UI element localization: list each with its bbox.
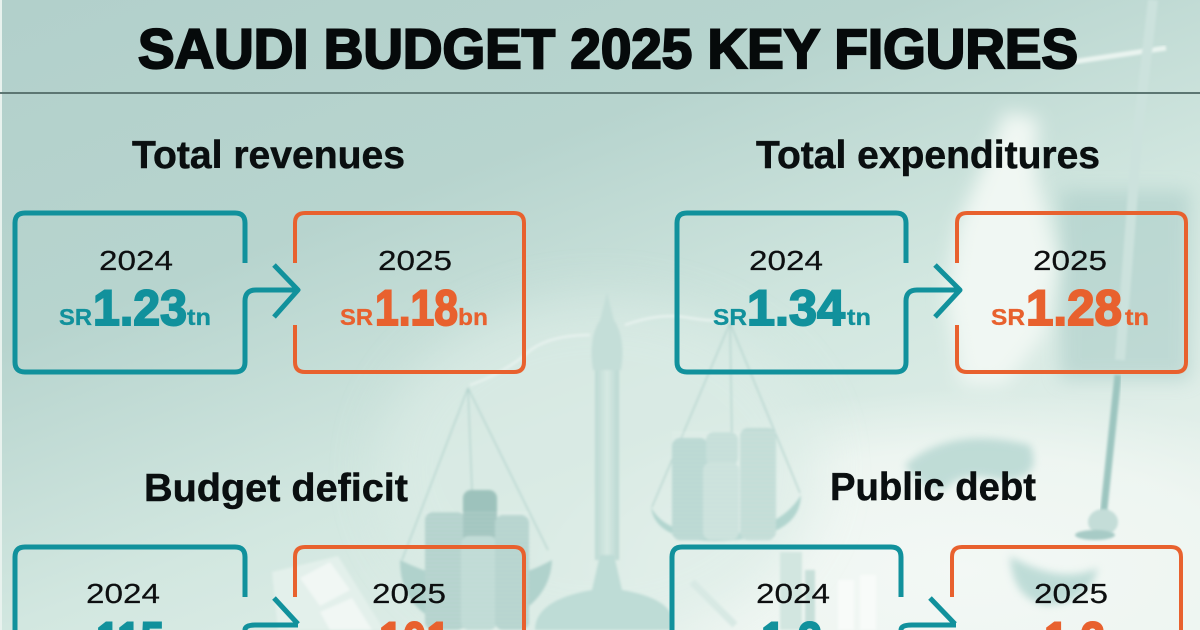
box 2025: 1.28 [1026,280,1122,336]
box 2024: tn [847,304,871,330]
box 2025: 2025 [372,578,446,609]
box 2024: SR [59,304,92,330]
panel: public debt [672,466,1181,630]
heading: public debt: Public debt [830,466,1036,509]
arrow [274,598,298,624]
box 2024 [677,213,960,372]
box 2024: 2024 [756,578,830,609]
box 2025: 2025 [1033,245,1107,276]
arrow [274,265,298,317]
panel: total expenditures [677,134,1186,372]
heading: budget deficit: Budget deficit [144,467,408,510]
box 2025 [295,547,524,630]
box 2024: SR [713,304,747,330]
box 2024: tn [187,304,211,330]
box 2024: 2024 [99,245,173,276]
box 2025: 1.18 [375,280,458,336]
box 2024: 1.34 [747,280,845,336]
box 2025 [295,213,524,372]
box 2025: tn [1125,304,1149,330]
box 2024: 2024 [86,578,160,609]
panel: budget deficit [15,467,524,630]
box 2025 [957,213,1186,372]
arrow [935,265,960,317]
box 2024 [672,547,956,630]
title rule [0,92,1200,94]
box 2025: bn [458,304,488,330]
box 2024 [15,213,296,372]
arrow [930,598,955,624]
title: SAUDI BUDGET 2025 KEY FIGURES [138,17,1078,80]
box 2025: SR [340,304,373,330]
panel: total revenues [15,134,524,372]
heading: total revenues: Total revenues [132,134,405,177]
box 2025: 2025 [1034,578,1108,609]
box 2025 [952,547,1181,630]
heading: total expenditures: Total expenditures [756,134,1100,177]
box 2024 [15,547,298,630]
box 2025: SR [991,304,1025,330]
box 2025: 2025 [378,245,452,276]
box 2024: 2024 [749,245,823,276]
box 2024: 1.23 [93,280,187,336]
